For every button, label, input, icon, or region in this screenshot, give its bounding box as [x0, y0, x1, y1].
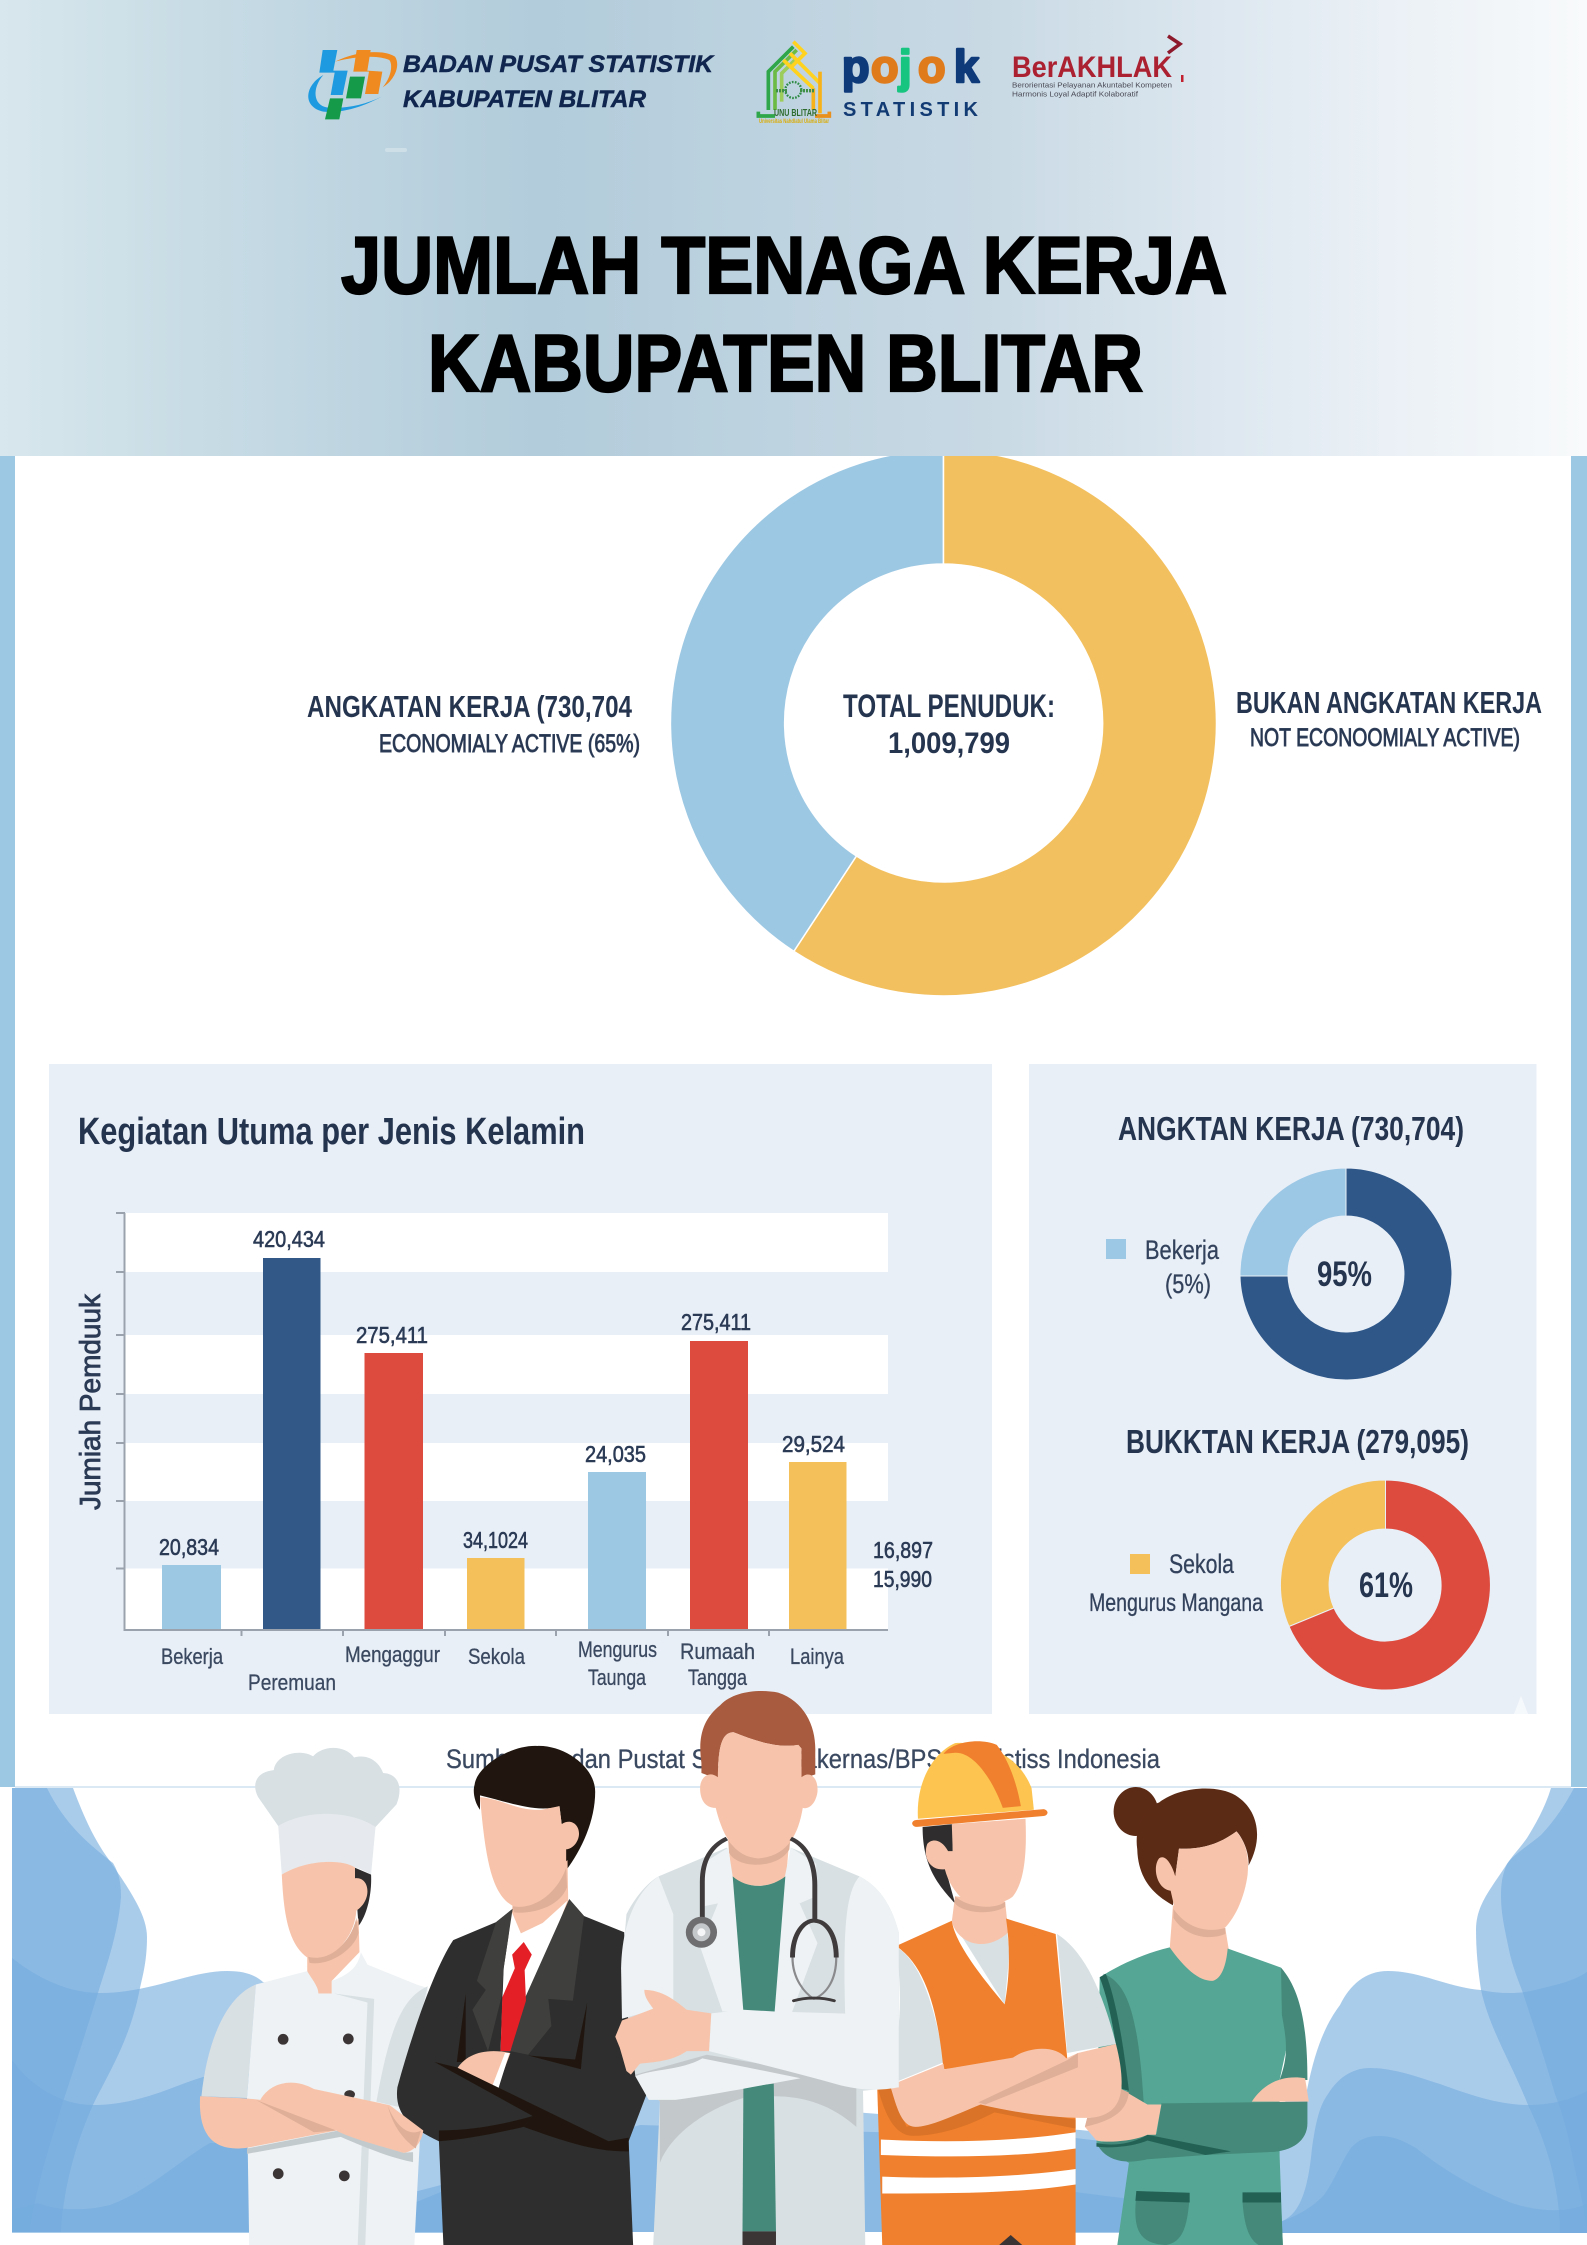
right side bar: [1571, 456, 1587, 1787]
heading: angkatan kerja: ANGKTAN KERJA (730,704): [1118, 1110, 1464, 1147]
header smudge: [385, 148, 407, 152]
heading: bukan angkatan kerja: BUKKTAN KERJA (279,095): [1126, 1423, 1469, 1460]
header band: [0, 0, 1587, 456]
logo: Pojok Statistik: [842, 41, 980, 121]
panel: breakdown donuts: [1029, 1064, 1536, 1714]
logo: Pojok Statistik: pojok: [842, 41, 980, 92]
logo: UNU Blitar: Universitas Nahdlatul Ulama Blitar: [759, 119, 829, 125]
legend: bekerja: [1106, 1235, 1220, 1299]
donut label: angkatan kerja: ANGKATAN KERJA (730,704: [307, 689, 633, 724]
logo: BerAKHLAK: Berorientasi Pelayanan Akuntabel Kompeten: [1012, 80, 1172, 90]
donut centre label: [843, 688, 1055, 760]
donut: bukan angkatan kerja: [1280, 1480, 1490, 1690]
y axis label: Jumiah Pemduuk: [75, 1294, 107, 1510]
chart bands: [125, 1213, 888, 1630]
donut label: bukan angkatan kerja: [1236, 685, 1542, 752]
logo text: BPS name: [403, 51, 715, 113]
donut label: angkatan kerja: [307, 689, 640, 758]
main donut chart: [670, 450, 1216, 996]
bar value labels: 275,411: [356, 1322, 428, 1348]
bar category labels: Tangga: [688, 1665, 748, 1690]
donut value: 61%: 61%: [1359, 1566, 1413, 1605]
bar category labels: Peremuan: [248, 1670, 336, 1695]
bar category labels: Bekerja: [161, 1644, 224, 1669]
logo: UNU Blitar: [758, 42, 829, 125]
donut: angkatan kerja: [1240, 1168, 1452, 1380]
donut label: angkatan kerja: ECONOMIALY ACTIVE (65%): [379, 730, 640, 758]
logo: BerAKHLAK: Harmonis Loyal Adaptif Kolaboratif: [1012, 90, 1139, 98]
logo: BerAKHLAK: BerAKHLAK: [1012, 51, 1172, 84]
title: KABUPATEN BLITAR: [428, 319, 1143, 409]
bar category labels: Lainya: [790, 1644, 845, 1669]
bar category labels: Rumaah: [680, 1639, 755, 1664]
bar value labels: 275,411: [681, 1309, 751, 1335]
chart axes: [116, 1213, 888, 1636]
panel: bar chart: [49, 1064, 992, 1714]
logo text: BPS name: KABUPATEN BLITAR: [403, 86, 647, 113]
bar category labels: Mengurus: [578, 1637, 657, 1662]
source note: Sumber: Badan Pustat Statistik, Sakernas/BPS, Statistiss Indonesia: [446, 1744, 1161, 1774]
bar value labels: 20,834: [159, 1534, 219, 1560]
background waves: [12, 1788, 1587, 2240]
bar category labels: Taunga: [588, 1665, 647, 1690]
bar value labels: 15,990: [873, 1566, 932, 1592]
legend: sekola: Mengurus Mangana: [1089, 1589, 1263, 1617]
chart heading: Kegiatan Utuma per Jenis Kelamin: [78, 1111, 585, 1153]
bar value labels: 16,897: [873, 1537, 933, 1563]
bar category labels: Sekola: [468, 1644, 526, 1669]
illustration: businessman: [397, 1746, 647, 2245]
left side bar: [0, 456, 15, 1787]
legend: sekola: [1089, 1549, 1263, 1617]
illustration: construction worker: [877, 1741, 1129, 2245]
logo text: BPS name: BADAN PUSAT STATISTIK: [403, 51, 715, 78]
illustration: chef arms: [200, 2083, 423, 2162]
bar category labels: Mengaggur: [345, 1642, 440, 1667]
legend: bekerja: Bekerja: [1145, 1235, 1220, 1265]
bar value labels: 24,035: [585, 1441, 646, 1467]
title: [341, 221, 1227, 409]
logo: Pojok Statistik: STATISTIK: [843, 99, 979, 121]
donut label: bukan angkatan kerja: NOT ECONOOMIALY ACTIVE): [1250, 724, 1520, 752]
donut value: 95%: 95%: [1317, 1255, 1372, 1294]
logo: BerAKHLAK: [1012, 36, 1184, 98]
illustration: chef body: [201, 1748, 428, 2245]
legend: bekerja: (5%): [1165, 1269, 1211, 1299]
bars: [162, 1258, 846, 1629]
legend: sekola: Sekola: [1169, 1549, 1235, 1579]
logo: BPS: [308, 50, 397, 119]
title: JUMLAH TENAGA KERJA: [341, 221, 1227, 311]
donut centre label: TOTAL PENUDUK:: [843, 688, 1055, 724]
panel bottom line: [15, 1786, 1571, 1788]
bar value labels: 29,524: [782, 1431, 845, 1457]
bar value labels: [159, 1226, 933, 1592]
bar category labels: [161, 1637, 845, 1695]
bar value labels: 420,434: [253, 1226, 325, 1252]
bar value labels: 34,1024: [463, 1527, 528, 1553]
logo: UNU Blitar: UNU BLITAR: [774, 108, 818, 119]
illustration: nurse: [1085, 1787, 1309, 2245]
donut centre label: 1,009,799: [888, 727, 1010, 760]
illustration: doctor: [615, 1691, 899, 2245]
